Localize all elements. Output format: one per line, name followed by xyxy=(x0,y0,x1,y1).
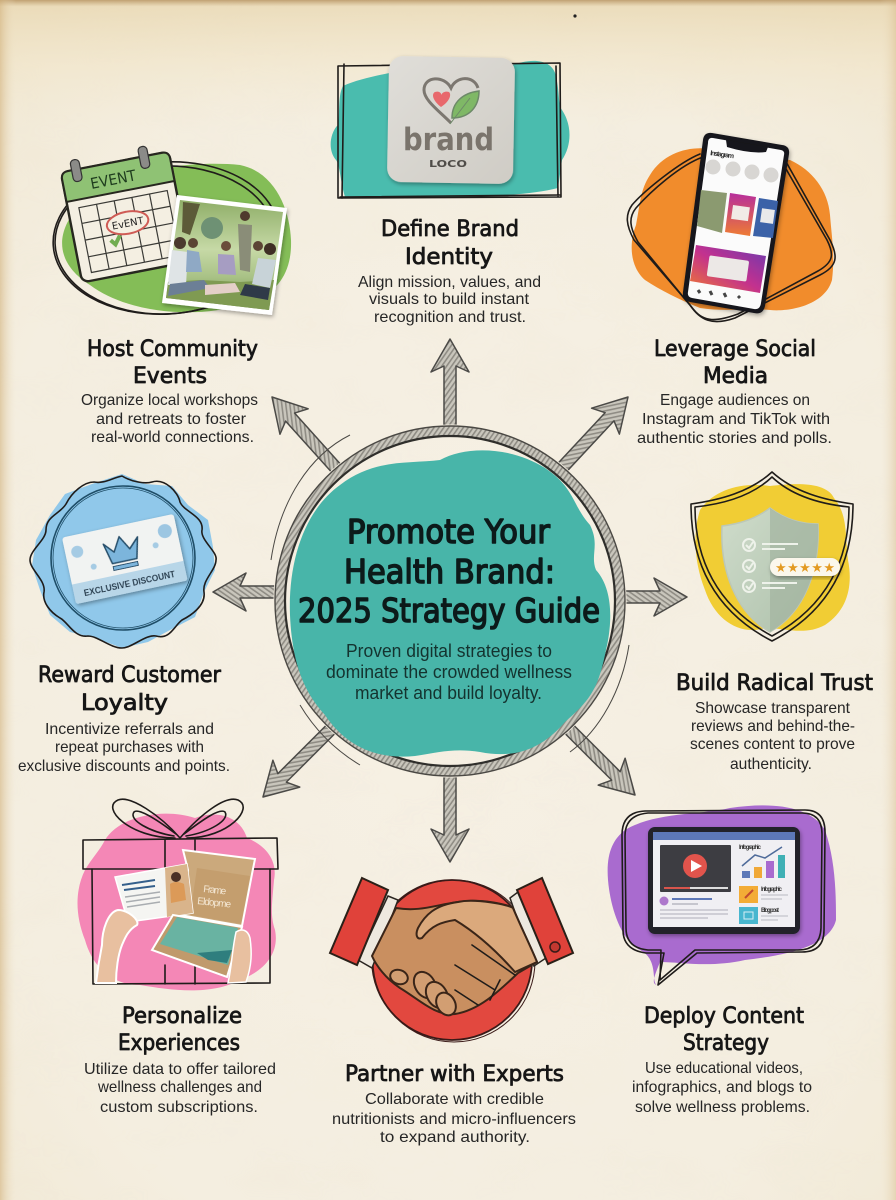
description: Organize local workshops xyxy=(81,392,258,409)
icon: tablet in speech bubble xyxy=(608,805,836,985)
panel: deploy content strategy xyxy=(608,805,836,1116)
description: exclusive discounts and points. xyxy=(18,758,230,775)
description: solve wellness problems. xyxy=(635,1099,810,1116)
icon: gift box and mailer: Eldopme xyxy=(197,896,232,911)
hub subtitle: Proven digital strategies to xyxy=(346,641,552,661)
hub subtitle xyxy=(326,641,572,703)
discount card xyxy=(62,514,188,604)
central hub xyxy=(271,426,629,776)
arrow: west xyxy=(213,573,279,611)
heading: Events xyxy=(133,364,207,389)
hands xyxy=(96,910,137,983)
description: Incentivize referrals and xyxy=(45,721,214,738)
icon: gift box and mailer: Frame xyxy=(203,884,227,897)
description: Use educational videos, xyxy=(645,1060,803,1077)
heading: Personalize xyxy=(122,1004,242,1029)
description xyxy=(18,721,230,775)
panel: host community events xyxy=(48,142,291,446)
panel: personalize experiences xyxy=(78,799,278,1116)
description: Utilize data to offer tailored xyxy=(84,1061,276,1078)
phone: Instagram xyxy=(710,150,734,160)
icon: tablet in speech bubble: Blog post xyxy=(761,908,779,914)
description xyxy=(690,700,855,773)
postcard xyxy=(115,864,193,922)
icon: shield with rating: ★★★★★ xyxy=(775,561,835,576)
description: Showcase transparent xyxy=(695,700,851,717)
panel: build radical trust xyxy=(676,472,873,773)
calendar xyxy=(59,142,190,282)
hub ring xyxy=(271,426,629,776)
panel: reward customer loyalty xyxy=(18,474,230,775)
arrows radiating from centre xyxy=(213,339,687,862)
hub title xyxy=(298,512,600,630)
description xyxy=(81,392,258,446)
description: custom subscriptions. xyxy=(100,1099,258,1116)
description xyxy=(332,1091,576,1146)
description: authentic stories and polls. xyxy=(637,430,832,447)
hands xyxy=(372,901,537,1014)
phone xyxy=(683,133,789,313)
description: and retreats to foster xyxy=(96,411,247,428)
heading: Leverage Social xyxy=(654,337,816,362)
description: repeat purchases with xyxy=(55,739,204,756)
hub title: Promote Your xyxy=(347,512,550,551)
heading: Loyalty xyxy=(81,691,168,716)
heading xyxy=(87,337,258,389)
tablet xyxy=(648,827,800,934)
heading: Reward Customer xyxy=(38,663,222,688)
calendar: EvENT xyxy=(111,216,146,233)
panel: define brand identity xyxy=(331,56,570,326)
hub subtitle: market and build loyalty. xyxy=(355,683,542,703)
icon: tablet in speech bubble: Infographic xyxy=(761,887,783,893)
heading xyxy=(654,337,816,389)
description xyxy=(632,1060,812,1116)
description: to expand authority. xyxy=(380,1129,530,1146)
heading: Strategy xyxy=(683,1031,769,1056)
heading: Media xyxy=(703,364,768,389)
description: visuals to build instant xyxy=(369,291,530,308)
icon: tablet in speech bubble: Infographic xyxy=(739,845,762,851)
heading xyxy=(118,1004,242,1056)
hub teal blob xyxy=(290,450,610,757)
photo xyxy=(162,195,287,315)
heading: Define Brand xyxy=(381,217,519,242)
description: Engage audiences on xyxy=(660,392,810,409)
icon: brand logo card: LOCO xyxy=(429,159,467,170)
hub title: Health Brand: xyxy=(344,552,555,591)
panel: partner with experts xyxy=(330,878,576,1146)
description: infographics, and blogs to xyxy=(632,1079,812,1096)
icon: shield with rating xyxy=(691,472,853,641)
icon: calendar and photo xyxy=(48,142,291,322)
right cuff xyxy=(510,892,546,966)
arrow: south xyxy=(431,772,469,862)
description: authenticity. xyxy=(730,756,812,773)
description: wellness challenges and xyxy=(97,1079,262,1096)
icon: smartphone on orange blob xyxy=(627,133,835,322)
description: scenes content to prove xyxy=(690,736,855,753)
heading: Build Radical Trust xyxy=(676,671,873,696)
icon: brand logo card: brand xyxy=(403,122,494,158)
description: nutritionists and micro-influencers xyxy=(332,1111,576,1128)
heading: Experiences xyxy=(118,1031,240,1056)
description xyxy=(84,1061,276,1116)
heading: Host Community xyxy=(87,337,258,362)
discount card: EXCLUSIVE DISCOUNT xyxy=(83,569,176,599)
heading: Identity xyxy=(405,245,493,270)
arrow: north-west xyxy=(258,384,350,481)
arrow: north-east xyxy=(549,384,642,480)
hub subtitle: dominate the crowded wellness xyxy=(326,662,572,682)
heading xyxy=(381,217,519,270)
description: real-world connections. xyxy=(91,429,254,446)
arrow: up xyxy=(431,339,469,429)
arrow: east xyxy=(621,578,687,616)
icon: brand logo card xyxy=(331,56,570,198)
description: reviews and behind-the- xyxy=(691,718,855,735)
heading xyxy=(644,1004,804,1056)
arrow: south-west xyxy=(250,716,344,810)
arrow: south-east xyxy=(554,714,648,808)
mailer lid xyxy=(180,850,255,926)
hub title: 2025 Strategy Guide xyxy=(298,591,600,630)
heading: Deploy Content xyxy=(644,1004,804,1029)
heading xyxy=(38,663,222,716)
description: Instagram and TikTok with xyxy=(642,411,830,428)
icon: gift box and mailer xyxy=(78,799,278,990)
mailer base xyxy=(152,915,242,977)
heading: Partner with Experts xyxy=(345,1062,564,1087)
description xyxy=(637,392,832,447)
description xyxy=(358,274,541,326)
icon: discount badge xyxy=(30,474,216,648)
left cuff xyxy=(358,896,398,968)
icon: handshake on red circle xyxy=(330,878,573,1042)
description: Align mission, values, and xyxy=(358,274,541,291)
description: recognition and trust. xyxy=(374,309,526,326)
description: Collaborate with credible xyxy=(365,1091,544,1108)
calendar: EVENT xyxy=(89,166,138,193)
gift outline xyxy=(83,799,278,984)
panel: leverage social media xyxy=(627,133,835,447)
